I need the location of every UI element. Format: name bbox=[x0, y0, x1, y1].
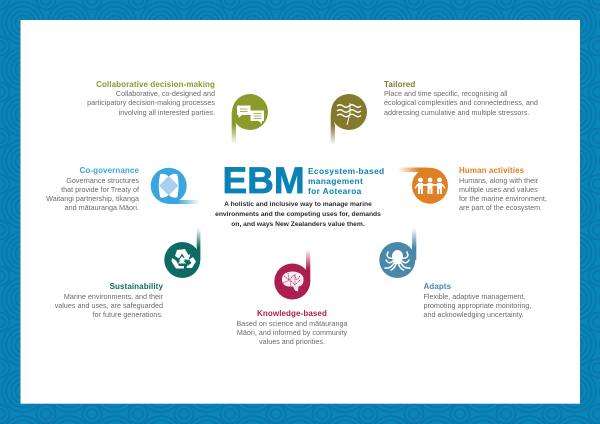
text: adapts: and acknowledging uncertainty. bbox=[424, 310, 524, 319]
central description: A holistic and inclusive way to manage marine bbox=[224, 201, 372, 208]
text: tailored: addressing cumulative and multiple stressors. bbox=[384, 108, 529, 117]
icon: collaborative decision-making bbox=[232, 94, 268, 144]
text: collaborative decision-making: Collaborative, co-designed and bbox=[116, 89, 215, 98]
icon: adapts bbox=[379, 228, 416, 278]
text: human activities: Humans, along with their bbox=[459, 176, 538, 185]
text: tailored: Tailored bbox=[384, 80, 415, 88]
text: collaborative decision-making: participatory decision-making processes bbox=[87, 98, 215, 107]
subtitle: ecosystem-based management bbox=[308, 166, 384, 196]
central description: on, and ways New Zealanders value them. bbox=[231, 221, 365, 228]
icon: sustainability bbox=[164, 228, 200, 278]
text: co-governance: and mātauranga Māori. bbox=[65, 203, 139, 212]
icon: knowledge-based bbox=[274, 250, 310, 300]
text: tailored: Place and time specific, recognising all bbox=[384, 89, 507, 98]
text: collaborative decision-making bbox=[87, 80, 215, 117]
text: human activities: are part of the ecosystem. bbox=[459, 203, 542, 212]
text: co-governance: Co-governance bbox=[79, 166, 139, 175]
icon: human activities bbox=[398, 168, 448, 204]
text: co-governance bbox=[46, 166, 139, 212]
text: co-governance: Governance structures bbox=[66, 176, 139, 185]
subtitle: ecosystem-based management: management bbox=[308, 176, 363, 186]
text: adapts: promoting appropriate monitoring, bbox=[424, 301, 531, 310]
text: sustainability: values and uses, are safeguarded bbox=[55, 301, 163, 310]
text: collaborative decision-making: involving all interested parties. bbox=[119, 108, 215, 117]
icon: tailored bbox=[331, 94, 367, 145]
text: adapts bbox=[424, 282, 531, 319]
text: co-governance: that provide for Treaty of bbox=[61, 185, 139, 194]
text: tailored: ecological complexities and connectedness, and bbox=[384, 98, 538, 107]
text: human activities: Human activities bbox=[459, 166, 524, 175]
text: tailored bbox=[384, 80, 538, 117]
text: co-governance: Waitangi partnership, tikanga bbox=[46, 194, 139, 203]
text: adapts: Flexible, adaptive management, bbox=[424, 292, 525, 301]
icon: co-governance bbox=[151, 168, 200, 204]
text: adapts: Adapts bbox=[424, 282, 451, 291]
text: sustainability: for future generations. bbox=[93, 310, 163, 319]
subtitle: ecosystem-based management: Ecosystem-based bbox=[308, 166, 384, 176]
EBM logo: EBM bbox=[222, 160, 305, 201]
text: knowledge-based: Māori, and informed by community bbox=[237, 328, 347, 337]
text: human activities bbox=[459, 166, 547, 212]
text: knowledge-based: values and priorities. bbox=[259, 337, 325, 346]
central description: environments and the competing uses for, demands bbox=[215, 211, 381, 218]
text: human activities: for the marine environment, bbox=[459, 194, 547, 203]
text: knowledge-based bbox=[236, 309, 348, 346]
text: collaborative decision-making: Collaborative decision-making bbox=[96, 80, 215, 88]
text: human activities: multiple uses and values bbox=[459, 185, 538, 194]
text: knowledge-based: Knowledge-based bbox=[257, 309, 327, 318]
subtitle: ecosystem-based management: for Aotearoa bbox=[308, 186, 362, 196]
central description bbox=[215, 201, 381, 228]
text: sustainability: Marine environments, and their bbox=[64, 292, 163, 301]
text: sustainability: Sustainability bbox=[110, 282, 163, 291]
text: sustainability bbox=[54, 282, 163, 319]
text: knowledge-based: Based on science and mātauranga bbox=[236, 319, 348, 328]
